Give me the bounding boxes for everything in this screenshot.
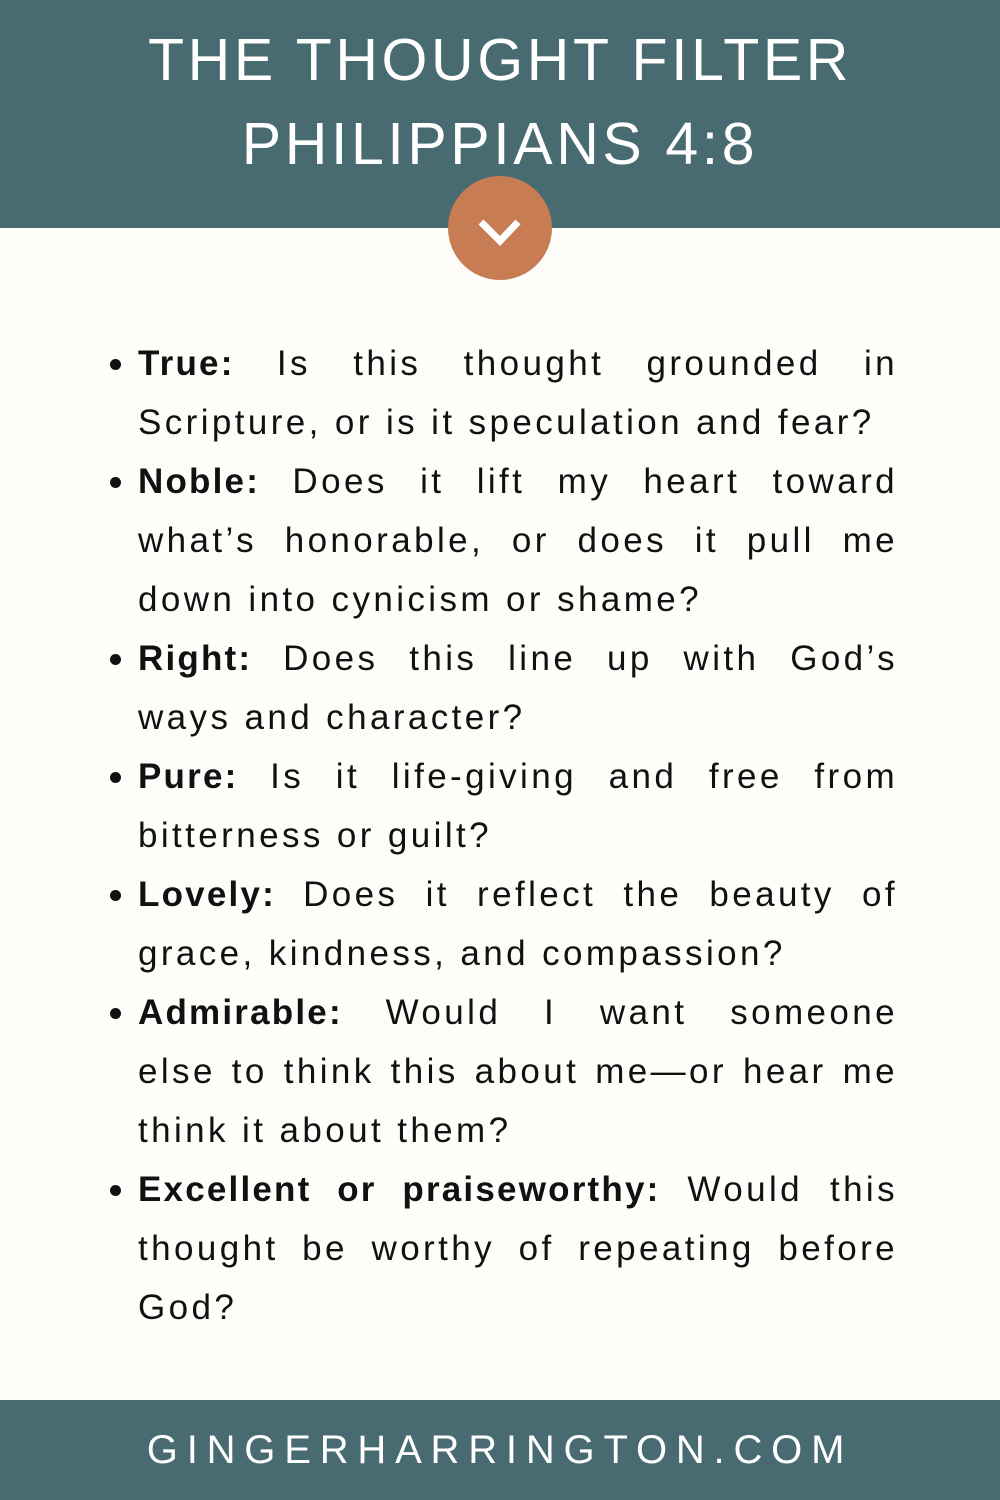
bullet list: God? (138, 1288, 237, 1327)
bullet list: think it about them? (138, 1111, 511, 1150)
bullet list: Admirable: Would I want someone (138, 993, 898, 1032)
title: PHILIPPIANS 4:8 (242, 111, 758, 177)
footer banner (0, 1400, 1000, 1500)
bullet list: Scripture, or is it speculation and fear? (138, 403, 875, 442)
title (148, 27, 852, 177)
bullet list: ways and character? (138, 698, 526, 737)
bullet list: down into cynicism or shame? (138, 580, 702, 619)
header banner (0, 0, 1000, 228)
bullet list: bitterness or guilt? (138, 816, 492, 855)
bullet list: grace, kindness, and compassion? (138, 934, 786, 973)
bullet list: Pure: Is it life-giving and free from (138, 757, 898, 796)
bullet list: Right: Does this line up with God’s (138, 639, 898, 678)
footer url: GINGERHARRINGTON.COM (147, 1428, 853, 1472)
bullet list: Excellent or praiseworthy: Would this (138, 1170, 898, 1209)
icon: chevron down circle (448, 176, 552, 280)
bullet list: True: Is this thought grounded in (138, 344, 898, 383)
bullet list (110, 344, 898, 1327)
bullet list: else to think this about me—or hear me (138, 1052, 898, 1091)
bullet list: Lovely: Does it reflect the beauty of (138, 875, 898, 914)
bullet list: what’s honorable, or does it pull me (138, 521, 898, 560)
bullet list: Noble: Does it lift my heart toward (138, 462, 898, 501)
bullet list: thought be worthy of repeating before (138, 1229, 898, 1268)
title: THE THOUGHT FILTER (148, 27, 852, 93)
